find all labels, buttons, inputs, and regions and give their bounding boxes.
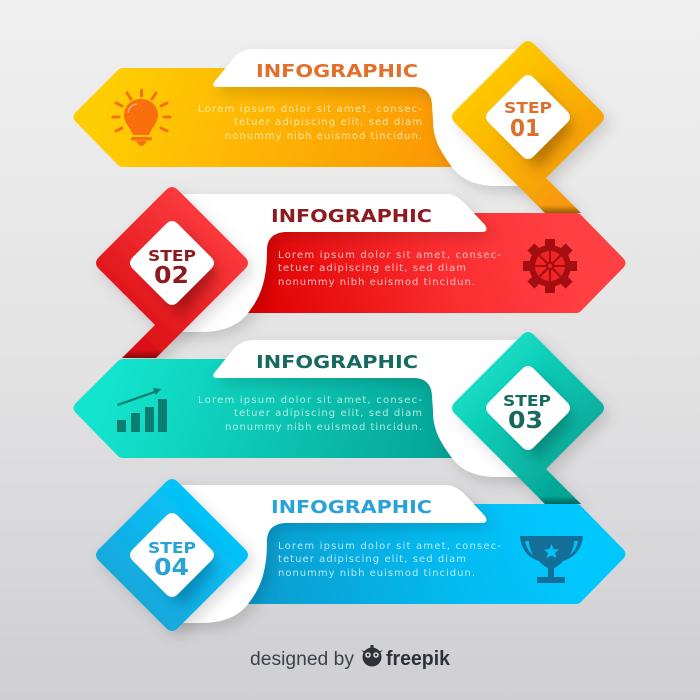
step label 3: STEP xyxy=(503,392,551,410)
inner diamond shadow 4 xyxy=(146,522,218,608)
body text 3 xyxy=(198,395,422,433)
white step badge 4 xyxy=(130,513,214,597)
credit text: designed by xyxy=(250,648,354,670)
body text 2: tetuer adipiscing elit, sed diam xyxy=(278,263,466,274)
body text 3: nonummy nibh euismod tincidun. xyxy=(225,422,422,433)
panel: step 4 xyxy=(96,479,626,631)
body text 4 xyxy=(278,541,501,579)
panel: step 1 xyxy=(74,41,604,213)
heading 4: INFOGRAPHIC xyxy=(271,498,432,518)
icon: light bulb xyxy=(113,90,170,146)
body text 1 xyxy=(198,104,422,142)
step number 3: 03 xyxy=(508,408,543,434)
heading 2: INFOGRAPHIC xyxy=(271,207,432,227)
white tab 2 xyxy=(172,194,486,332)
heading 3: INFOGRAPHIC xyxy=(256,353,418,373)
icon: trophy xyxy=(520,536,583,583)
footer: freepik credit xyxy=(250,645,451,670)
diamond 1 with tail xyxy=(452,41,604,213)
body text 2 xyxy=(278,250,501,288)
tail shade 3 xyxy=(537,496,581,504)
panel: step 2 xyxy=(96,187,626,358)
step label 4: STEP xyxy=(148,539,196,557)
body text 1: Lorem ipsum dolor sit amet, consec- xyxy=(198,104,422,115)
icon: gear xyxy=(523,239,577,293)
heading 1: INFOGRAPHIC xyxy=(256,62,418,82)
white step badge 2 xyxy=(130,221,214,305)
body text 1: nonummy nibh euismod tincidun. xyxy=(225,131,422,142)
body text 3: Lorem ipsum dolor sit amet, consec- xyxy=(198,395,422,406)
white tab 1 xyxy=(213,49,525,186)
body text 3: tetuer adipiscing elit, sed diam xyxy=(234,408,422,419)
body text 4: Lorem ipsum dolor sit amet, consec- xyxy=(278,541,501,552)
step label 2: STEP xyxy=(148,247,196,265)
diamond 2 with tail xyxy=(96,187,248,358)
red arrow band xyxy=(240,213,626,313)
step label 1: STEP xyxy=(504,99,552,117)
body text 2: Lorem ipsum dolor sit amet, consec- xyxy=(278,250,501,261)
white tab 4 xyxy=(172,485,486,623)
icon: freepik logo xyxy=(361,645,383,666)
tail shade 1 xyxy=(537,205,581,213)
tail shade 2 xyxy=(122,350,164,358)
freepik wordmark: freepik xyxy=(386,648,451,670)
white step badge 3 xyxy=(486,366,570,450)
panel: step 3 xyxy=(74,332,604,504)
icon: bar chart with arrow xyxy=(117,388,167,432)
body text 2: nonummy nibh euismod tincidun. xyxy=(278,277,475,288)
teal arrow band xyxy=(74,359,470,458)
inner diamond shadow 2 xyxy=(146,230,218,316)
body text 4: tetuer adipiscing elit, sed diam xyxy=(278,554,466,565)
body text 4: nonummy nibh euismod tincidun. xyxy=(278,568,475,579)
blue arrow band xyxy=(240,504,626,604)
inner diamond shadow 3 xyxy=(502,375,574,461)
step number 2: 02 xyxy=(154,263,189,289)
step number 4: 04 xyxy=(154,555,189,581)
inner diamond shadow 1 xyxy=(502,84,574,170)
diamond 3 with tail xyxy=(452,332,604,504)
body text 1: tetuer adipiscing elit, sed diam xyxy=(234,117,422,128)
diamond 4 xyxy=(96,479,248,631)
white step badge 1 xyxy=(486,75,570,159)
step number 1: 01 xyxy=(510,116,540,142)
white tab 3 xyxy=(213,340,525,477)
orange arrow band xyxy=(74,68,470,167)
